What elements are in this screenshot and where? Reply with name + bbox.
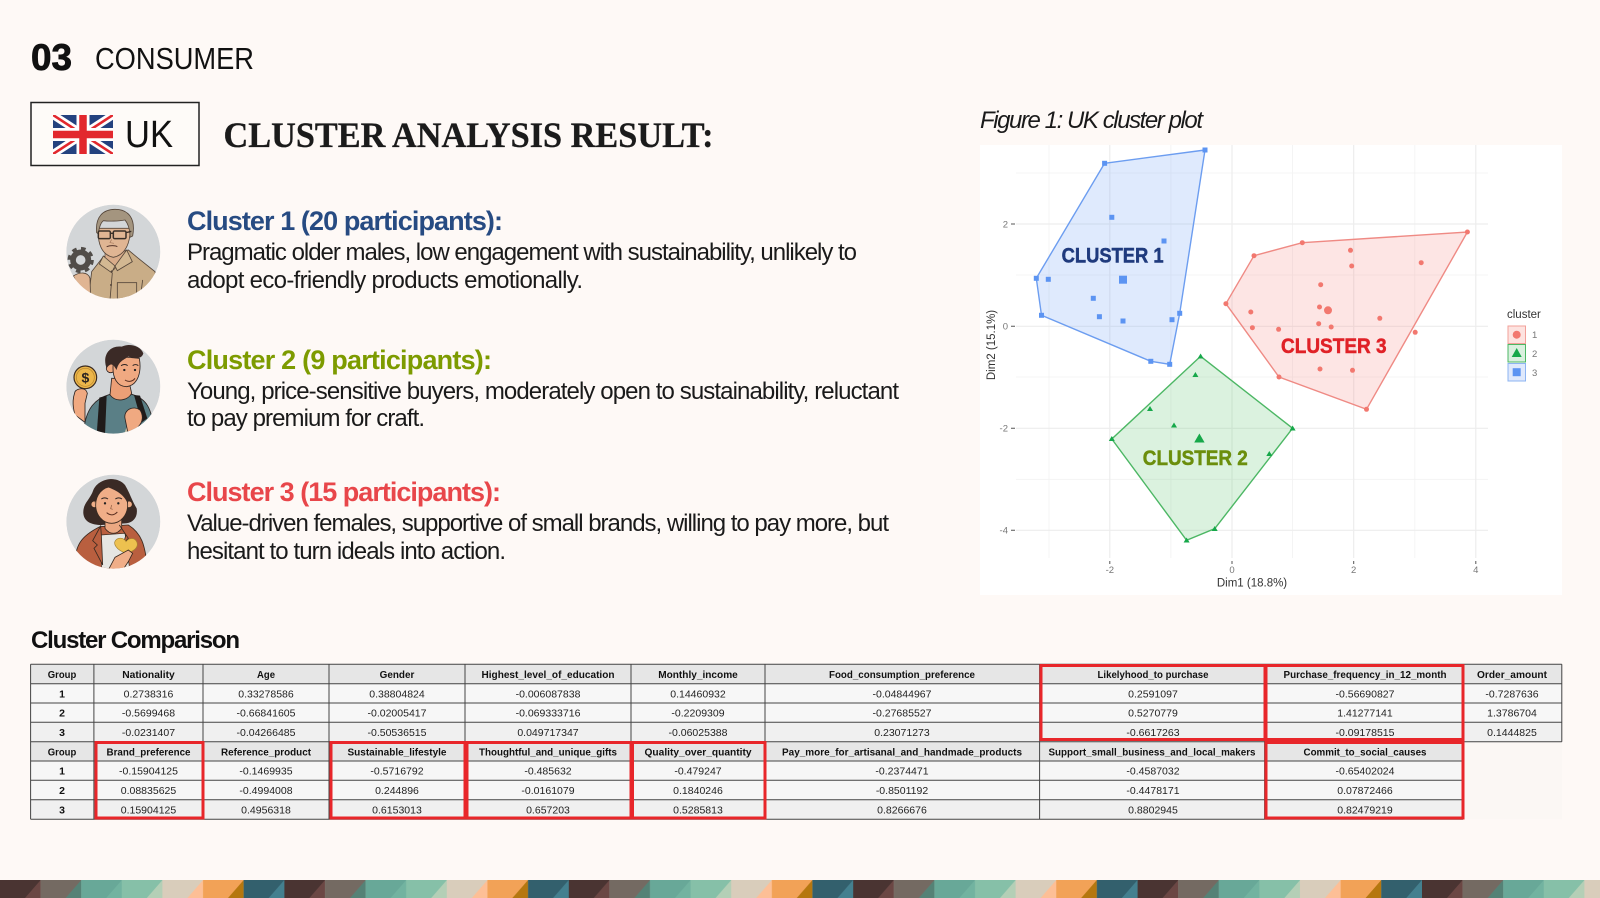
table top block: Nationality bbox=[122, 669, 175, 681]
axis labels and ticks: Dim2 (15.1%) bbox=[986, 310, 998, 380]
cluster 1 description: Pragmatic older males, low engagement with sustainability, unlikely to bbox=[187, 239, 857, 266]
legend: cluster: 2 bbox=[1532, 349, 1537, 360]
cluster 2 description: Cluster 2 (9 participants): bbox=[187, 345, 492, 375]
table top block: 0.33278586 bbox=[238, 688, 294, 700]
table top block: 0.2738316 bbox=[124, 688, 173, 700]
table bottom block: 3 bbox=[59, 804, 65, 816]
table bottom block: 0.1840246 bbox=[673, 785, 723, 797]
table bottom block: Quality_over_quantity bbox=[644, 746, 752, 758]
table top block: Age bbox=[257, 669, 275, 681]
axis labels and ticks: -2 bbox=[1106, 565, 1114, 576]
table top block: -0.7287636 bbox=[1485, 688, 1539, 700]
cluster 1 description bbox=[187, 206, 857, 294]
cluster 2 hull and points bbox=[1109, 354, 1296, 542]
section number and title bbox=[31, 37, 254, 78]
table bottom block bbox=[48, 746, 1427, 816]
table bottom block: 2 bbox=[59, 785, 65, 797]
table bottom block: Sustainable_lifestyle bbox=[348, 746, 447, 758]
table top block: Food_consumption_preference bbox=[829, 669, 975, 681]
table bottom block: 0.5285813 bbox=[673, 804, 723, 816]
axis labels and ticks: 0 bbox=[1229, 565, 1235, 576]
table bottom block: 0.4956318 bbox=[241, 804, 291, 816]
avatar: cluster 3 woman with heart bbox=[66, 475, 160, 572]
table bottom block: -0.15904125 bbox=[119, 766, 178, 778]
table bottom block: Group bbox=[48, 746, 76, 758]
table bottom block: -0.4478171 bbox=[1126, 785, 1180, 797]
avatar: cluster 2 young man with coin: $ bbox=[81, 369, 89, 385]
cluster labels bbox=[1062, 245, 1387, 470]
heading: cluster comparison: Cluster Comparison bbox=[31, 627, 240, 654]
table top block: -0.56690827 bbox=[1336, 688, 1395, 700]
cluster 2 description: to pay premium for craft. bbox=[187, 405, 425, 432]
table bottom block: 0.8802945 bbox=[1128, 804, 1178, 816]
heading: cluster analysis result: CLUSTER ANALYSIS RESULT: bbox=[224, 115, 714, 155]
table top block: -0.006087838 bbox=[516, 688, 581, 700]
table bottom block: 0.82479219 bbox=[1337, 804, 1393, 816]
cluster 2 description: Young, price-sensitive buyers, moderately open to sustainability, reluctant bbox=[187, 378, 899, 405]
legend: cluster: 3 bbox=[1532, 368, 1537, 379]
cluster 3 description: hesitant to turn ideals into action. bbox=[187, 538, 506, 565]
cluster 1 description: Cluster 1 (20 participants): bbox=[187, 206, 503, 236]
table bottom block: Reference_product bbox=[221, 746, 311, 758]
table top block: -0.5699468 bbox=[122, 708, 175, 720]
axis labels and ticks: -4 bbox=[1000, 526, 1008, 536]
table top block: -0.04266485 bbox=[237, 727, 296, 739]
axis labels and ticks: Dim1 (18.8%) bbox=[1217, 578, 1287, 590]
section number and title: 03 bbox=[31, 37, 72, 78]
axis labels and ticks: 0 bbox=[1003, 322, 1008, 332]
table top block: 0.5270779 bbox=[1128, 708, 1178, 720]
table top block: Group bbox=[48, 669, 76, 681]
table bottom block: 0.244896 bbox=[375, 785, 419, 797]
cluster 2 description bbox=[187, 345, 899, 432]
table top block: 0.38804824 bbox=[369, 688, 425, 700]
table top block: -0.09178515 bbox=[1336, 727, 1395, 739]
table top block: -0.06025388 bbox=[669, 727, 728, 739]
table top block: -0.66841605 bbox=[237, 708, 296, 720]
avatar: cluster 2 young man with coin bbox=[66, 340, 160, 435]
cluster labels: CLUSTER 3 bbox=[1281, 335, 1387, 358]
table bottom block: 0.6153013 bbox=[372, 804, 422, 816]
table top block: -0.0231407 bbox=[122, 727, 175, 739]
axis labels and ticks: 4 bbox=[1473, 565, 1478, 576]
table top block: Gender bbox=[380, 669, 414, 681]
table top block: Order_amount bbox=[1477, 669, 1547, 681]
table bottom block: Commit_to_social_causes bbox=[1304, 746, 1427, 758]
table top block: 3 bbox=[59, 727, 65, 739]
table bottom block: Thoughtful_and_unique_gifts bbox=[479, 746, 617, 758]
table top block: 0.23071273 bbox=[874, 727, 930, 739]
table bottom block: 1 bbox=[59, 766, 65, 778]
avatar: cluster 1 older man with gear bbox=[66, 205, 160, 301]
table bottom block: Brand_preference bbox=[106, 746, 191, 758]
legend: cluster bbox=[1507, 309, 1541, 381]
table: cluster comparison bbox=[31, 664, 1562, 819]
table top block: -0.2209309 bbox=[671, 708, 725, 720]
table top block: -0.27685527 bbox=[873, 708, 932, 720]
table top block: 0.1444825 bbox=[1487, 727, 1537, 739]
table bottom block: 0.07872466 bbox=[1337, 785, 1393, 797]
table top block: Likelyhood_to purchase bbox=[1098, 669, 1209, 681]
section number and title: CONSUMER bbox=[95, 41, 254, 76]
country badge: UK bbox=[31, 102, 199, 166]
axis labels and ticks: -2 bbox=[1000, 424, 1008, 434]
cluster 1 hull and points bbox=[1034, 148, 1208, 367]
table bottom block: 0.15904125 bbox=[121, 804, 176, 816]
legend: cluster: 1 bbox=[1532, 330, 1537, 341]
red highlight boxes bbox=[96, 666, 1463, 818]
table top block bbox=[48, 669, 1547, 739]
table top block: 0.14460932 bbox=[670, 688, 726, 700]
table bottom block: -0.5716792 bbox=[370, 766, 424, 778]
table bottom block: Support_small_business_and_local_makers bbox=[1048, 746, 1256, 758]
table bottom block: -0.479247 bbox=[674, 766, 722, 778]
axis labels and ticks: 2 bbox=[1351, 565, 1356, 576]
cluster 1 description: adopt eco-friendly products emotionally. bbox=[187, 267, 583, 294]
table bottom block: -0.0161079 bbox=[521, 785, 575, 797]
table top block: Purchase_frequency_in_12_month bbox=[1284, 669, 1446, 681]
cluster labels: CLUSTER 2 bbox=[1143, 447, 1248, 470]
table bottom block: -0.4587032 bbox=[1126, 766, 1180, 778]
table top block: -0.50536515 bbox=[368, 727, 427, 739]
cluster 3 description: Cluster 3 (15 participants): bbox=[187, 477, 501, 507]
table bottom block: -0.2374471 bbox=[875, 766, 929, 778]
table bottom block: 0.8266676 bbox=[877, 804, 927, 816]
table bottom block: 0.657203 bbox=[526, 804, 570, 816]
chart: UK cluster plot bbox=[980, 145, 1562, 595]
axis labels and ticks bbox=[986, 220, 1478, 590]
table bottom block: Pay_more_for_artisanal_and_handmade_products bbox=[782, 746, 1022, 758]
table bottom block: -0.1469935 bbox=[239, 766, 293, 778]
table top block: 1 bbox=[59, 688, 65, 700]
table top block: -0.069333716 bbox=[516, 708, 581, 720]
cluster labels: CLUSTER 1 bbox=[1062, 245, 1164, 268]
table top block: 1.41277141 bbox=[1337, 708, 1393, 720]
table top block: Monthly_income bbox=[658, 669, 738, 681]
table bottom block: 0.08835625 bbox=[121, 785, 176, 797]
figure caption: Figure 1: UK cluster plot bbox=[980, 107, 1204, 134]
table top block: -0.6617263 bbox=[1126, 727, 1180, 739]
table bottom block: -0.8501192 bbox=[876, 785, 928, 797]
legend: cluster: cluster bbox=[1507, 309, 1541, 321]
table top block: -0.04844967 bbox=[873, 688, 932, 700]
country badge: UK: UK bbox=[125, 114, 173, 156]
decorative bottom strip bbox=[0, 880, 1600, 898]
axis labels and ticks: 2 bbox=[1003, 220, 1008, 230]
table top block: 1.3786704 bbox=[1487, 708, 1537, 720]
cluster 3 description bbox=[187, 477, 889, 565]
table top block: 0.2591097 bbox=[1128, 688, 1178, 700]
table bottom block: -0.485632 bbox=[524, 766, 572, 778]
cluster 3 description: Value-driven females, supportive of small brands, willing to pay more, but bbox=[187, 510, 889, 537]
cluster 3 hull and points bbox=[1223, 230, 1470, 412]
table top block: Highest_level_of_education bbox=[482, 669, 614, 681]
icon: UK flag bbox=[53, 115, 113, 154]
table top block: 0.049717347 bbox=[517, 727, 579, 739]
table top block: -0.02005417 bbox=[368, 708, 427, 720]
table bottom block: -0.65402024 bbox=[1336, 766, 1395, 778]
table bottom block: -0.4994008 bbox=[239, 785, 293, 797]
table top block: 2 bbox=[59, 708, 65, 720]
